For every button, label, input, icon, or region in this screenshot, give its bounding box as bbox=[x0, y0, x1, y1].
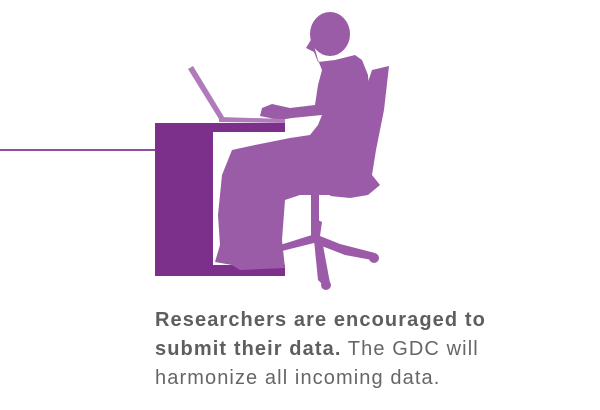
chair bbox=[280, 66, 389, 290]
illustration: researcher at desk bbox=[0, 12, 389, 290]
connector line bbox=[0, 149, 156, 151]
caption text: Researchers are encouraged to submit their data. The GDC will harmonize all incoming data. bbox=[155, 309, 486, 389]
laptop bbox=[188, 66, 285, 123]
person bbox=[215, 12, 370, 270]
desk bbox=[155, 123, 285, 276]
